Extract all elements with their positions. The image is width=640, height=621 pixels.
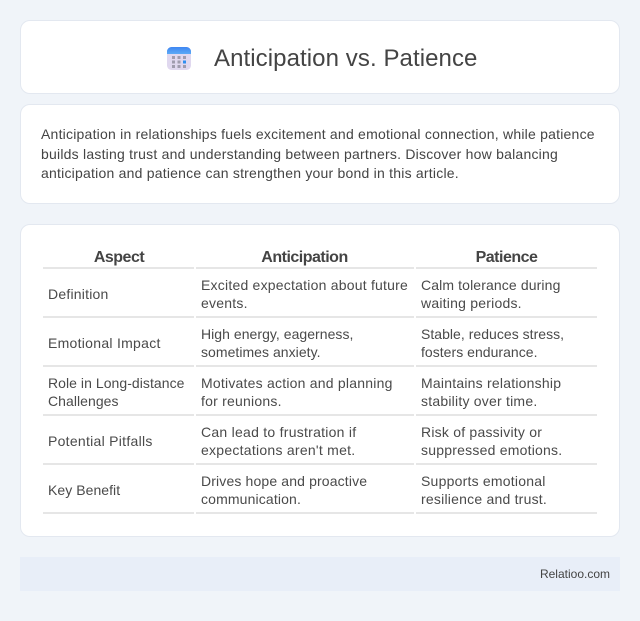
panel: comparison table: resilience and trust. [421,491,547,507]
panel: comparison table: waiting periods. [421,295,522,311]
panel: comparison table: fosters endurance. [421,344,538,360]
table header: Aspect: Aspect [94,249,144,266]
icon: calendar [167,47,191,70]
footer bar [20,557,620,591]
panel: comparison table: Motivates action and planning [201,375,393,391]
panel: header [20,20,620,94]
panel: comparison table: Risk of passivity or [421,424,542,440]
panel: comparison table: Maintains relationship [421,375,561,391]
panel: comparison table [20,224,620,537]
row: Role in Long-distance Challenges: Role in Long-distance [48,375,184,391]
panel: comparison table: Drives hope and proactive [201,473,367,489]
panel: comparison table: Can lead to frustration if [201,424,356,440]
panel: comparison table: communication. [201,491,301,507]
row: Emotional Impact: Emotional Impact [48,335,161,351]
panel: comparison table: for reunions. [201,393,282,409]
panel: comparison table: stability over time. [421,393,537,409]
row: Role in Long-distance Challenges: Challenges [48,393,119,409]
intro text: anticipation and patience can strengthen your bond in this article. [41,165,459,181]
intro text [41,126,595,181]
footer brand: Relatioo.com [540,567,610,581]
panel: introduction [20,104,620,204]
panel: comparison table: Excited expectation about future [201,277,408,293]
row: Definition: Definition [48,286,109,302]
panel: comparison table: events. [201,295,248,311]
panel: comparison table: sometimes anxiety. [201,344,321,360]
panel: comparison table: Stable, reduces stress, [421,326,564,342]
panel: comparison table: suppressed emotions. [421,442,562,458]
row: Key Benefit: Key Benefit [48,482,120,498]
intro text: Anticipation in relationships fuels excitement and emotional connection, while patience [41,126,595,142]
panel: comparison table: Supports emotional [421,473,546,489]
row: Potential Pitfalls: Potential Pitfalls [48,433,153,449]
panel: comparison table: High energy, eagerness, [201,326,353,342]
intro text: builds lasting trust and understanding between partners. Discover how balancing [41,146,558,162]
table header: Patience: Patience [476,249,537,266]
title: Anticipation vs. Patience [214,45,477,72]
row: Role in Long-distance Challenges [48,375,184,409]
panel: comparison table: expectations aren't met. [201,442,355,458]
panel: comparison table: Calm tolerance during [421,277,560,293]
table header: Anticipation: Anticipation [261,249,348,266]
